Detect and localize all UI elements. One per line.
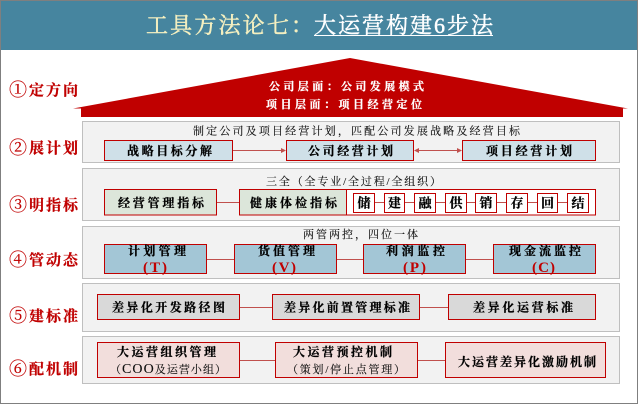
chain: eight business links: 建 xyxy=(388,196,401,210)
roof: company and project level: 项目层面：项目经营定位 xyxy=(266,97,422,111)
step label 1: 定方向: 定方向 xyxy=(29,81,78,99)
step label 4: 管动态: ④ xyxy=(9,250,27,270)
box: 健康体检指标: 健康体检指标 xyxy=(250,195,338,210)
box: 大运营预控机制: （策划/停止点管理） xyxy=(287,362,405,376)
box: 利润监控 P xyxy=(364,243,466,276)
box: 大运营组织管理: （COO及运营小组） xyxy=(110,362,226,377)
box: 差异化开发路径图: 差异化开发路径图 xyxy=(112,300,225,314)
double arrow: company plan and project plan xyxy=(414,148,462,153)
box: 经营管理指标 xyxy=(104,190,216,215)
box: 计划管理 T: 计划管理 xyxy=(128,243,186,258)
roof: company and project level xyxy=(73,58,628,117)
header: title banner xyxy=(1,1,637,50)
box: 差异化前置管理标准: 差异化前置管理标准 xyxy=(284,300,410,314)
step label 2: 展计划 xyxy=(9,138,78,158)
step label 5: 建标准: ⑤ xyxy=(9,306,27,326)
step label 3: 明指标: ③ xyxy=(9,195,27,215)
chain: eight business links: 融 xyxy=(418,196,432,210)
chain: eight business links: 存 xyxy=(510,196,524,210)
arrow: strategy to company plan xyxy=(232,148,286,153)
step label 6: 配机制: 配机制 xyxy=(29,360,78,378)
chain: eight business links xyxy=(346,190,596,215)
box: 货值管理 V xyxy=(234,243,336,276)
box: 现金流监控 C: (C) xyxy=(532,260,555,276)
step label 2: 展计划: 展计划 xyxy=(29,139,78,157)
step label 3: 明指标 xyxy=(9,195,80,215)
box: 货值管理 V: 货值管理 xyxy=(258,243,315,258)
chain: eight business links: 回 xyxy=(541,196,554,210)
panel: indicators xyxy=(82,168,620,220)
box: 大运营组织管理 xyxy=(98,342,240,378)
box: 大运营差异化激励机制 xyxy=(446,342,606,378)
box: 大运营差异化激励机制: 大运营差异化激励机制 xyxy=(458,354,596,369)
box: 大运营预控机制: 大运营预控机制 xyxy=(293,344,392,359)
step label 2: 展计划: ② xyxy=(9,138,27,158)
box: 差异化运营标准: 差异化运营标准 xyxy=(473,300,573,314)
box: 差异化开发路径图 xyxy=(98,294,240,320)
step label 6: 配机制 xyxy=(9,359,78,379)
box: 大运营组织管理: 大运营组织管理 xyxy=(117,344,216,359)
box: 差异化前置管理标准 xyxy=(272,294,420,320)
header: title banner: 大运营构建6步法 xyxy=(314,13,494,38)
panel: plans xyxy=(82,122,620,162)
roof: company and project level: 公司层面：公司发展模式 xyxy=(269,79,424,93)
box: 计划管理 T: (T) xyxy=(143,260,167,276)
chain: eight business links: 供 xyxy=(450,196,464,210)
box: 大运营预控机制 xyxy=(276,342,418,378)
box: 货值管理 V: (V) xyxy=(272,260,296,276)
panel: indicators: 三全（全专业/全过程/全组织） xyxy=(266,174,441,188)
chain: eight business links: 储 xyxy=(358,196,371,210)
box: 项目经营计划 xyxy=(462,140,596,160)
step label 5: 建标准: 建标准 xyxy=(29,307,78,325)
step label 4: 管动态 xyxy=(9,250,79,270)
box: 战略目标分解: 战略目标分解 xyxy=(127,143,212,158)
box: 现金流监控 C: 现金流监控 xyxy=(509,243,581,258)
panel: dynamic controls xyxy=(82,226,620,278)
box: 差异化运营标准 xyxy=(448,294,596,320)
chain: eight business links: 销 xyxy=(480,196,493,210)
panel: mechanisms xyxy=(82,336,620,384)
box: 健康体检指标 xyxy=(240,190,346,215)
header: title banner: 工具方法论七： xyxy=(146,13,313,38)
box: 利润监控 P: (P) xyxy=(403,260,426,276)
box: 利润监控 P: 利润监控 xyxy=(386,243,445,258)
box: 公司经营计划 xyxy=(286,140,414,160)
step label 4: 管动态: 管动态 xyxy=(29,251,79,269)
panel: standards xyxy=(82,284,620,332)
panel: dynamic controls: 两管两控，四位一体 xyxy=(303,227,418,241)
box: 项目经营计划: 项目经营计划 xyxy=(486,143,572,158)
panel: plans: 制定公司及项目经营计划，匹配公司发展战略及经营目标 xyxy=(193,124,521,138)
chain: eight business links: 结 xyxy=(572,196,585,210)
box: 计划管理 T xyxy=(104,243,206,276)
box: 经营管理指标: 经营管理指标 xyxy=(118,195,205,210)
step label 6: 配机制: ⑥ xyxy=(9,359,27,379)
box: 公司经营计划: 公司经营计划 xyxy=(308,143,393,158)
box: 现金流监控 C xyxy=(494,243,596,276)
box: 战略目标分解 xyxy=(104,140,232,160)
step label 3: 明指标: 明指标 xyxy=(29,196,80,214)
step label 1: 定方向 xyxy=(9,80,78,100)
step label 1: 定方向: ① xyxy=(9,80,27,100)
step label 5: 建标准 xyxy=(9,306,78,326)
